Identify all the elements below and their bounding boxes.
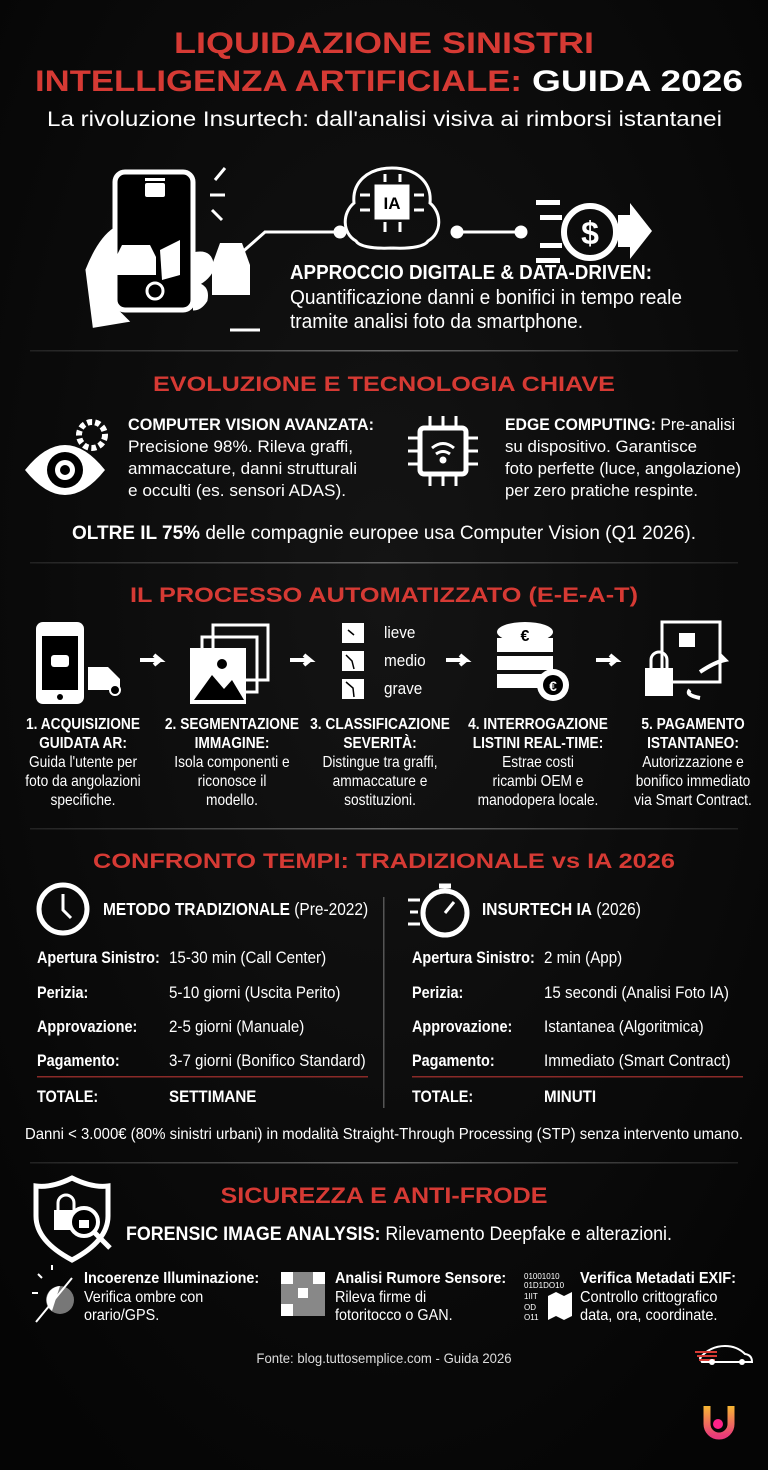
text: edge computing: su dispositivo. Garantisce <box>505 437 697 456</box>
heading: confronto: CONFRONTO TEMPI: TRADIZIONALE vs IA 2026 <box>93 850 675 873</box>
item: rumore sensore: fotoritocco o GAN. <box>335 1306 453 1324</box>
text: computer vision: COMPUTER VISION AVANZATA: <box>128 415 374 434</box>
icon: shield <box>36 1178 110 1260</box>
heading: sicurezza: SICUREZZA E ANTI-FRODE <box>220 1183 548 1208</box>
process steps text: sostituzioni. <box>344 791 416 809</box>
process icons: € <box>549 678 557 694</box>
text: lieve <box>384 623 415 642</box>
text: forensic: FORENSIC IMAGE ANALYSIS: Rilevamento Deepfake e alterazioni. <box>126 1224 672 1245</box>
text: computer vision <box>128 415 374 500</box>
icon: eye with gear <box>25 422 105 495</box>
process steps text: ricambi OEM e <box>493 772 583 790</box>
item: exif: Controllo crittografico <box>580 1288 717 1306</box>
icon: binary map: OD <box>524 1303 536 1312</box>
table: traditional: Approvazione: <box>37 1018 137 1036</box>
icon: fast payment <box>536 200 652 263</box>
text: edge computing: per zero pratiche respinte. <box>505 481 698 500</box>
logo <box>707 1406 731 1436</box>
process steps text: 2. SEGMENTAZIONE <box>165 715 299 733</box>
text: approccio digitale: APPROCCIO DIGITALE & DATA-DRIVEN: <box>290 262 652 284</box>
heading: processo: IL PROCESSO AUTOMATIZZATO (E-E-A-T) <box>130 584 638 607</box>
table: insurtech: Istantanea (Algoritmica) <box>544 1017 704 1036</box>
process steps text: riconosce il <box>198 772 266 790</box>
icon: binary map: 1IIT <box>524 1292 538 1301</box>
icon: clock <box>39 885 87 933</box>
item: illuminazione: orario/GPS. <box>84 1306 159 1324</box>
item: exif: Verifica Metadati EXIF: <box>580 1269 736 1287</box>
table: traditional: SETTIMANE <box>169 1087 257 1106</box>
process steps text: Distingue tra graffi, <box>322 753 438 771</box>
title: LIQUIDAZIONE SINISTRI <box>174 27 594 60</box>
icon: fast payment: $ <box>581 215 599 251</box>
process steps text: ammaccature e <box>333 772 427 790</box>
process steps text: Guida l'utente per <box>29 753 137 771</box>
table: traditional: 15-30 min (Call Center) <box>169 948 326 967</box>
table: insurtech <box>412 899 743 1106</box>
process steps text: Autorizzazione e <box>642 753 744 771</box>
table: insurtech: Perizia: <box>412 984 463 1002</box>
icon: hand with smartphone and cars <box>88 168 340 330</box>
process steps text: 1. ACQUISIZIONE <box>26 715 140 733</box>
item: illuminazione: Verifica ombre con <box>84 1288 203 1306</box>
process steps text: bonifico immediato <box>636 772 750 790</box>
item: rumore sensore: Rileva firme di <box>335 1288 426 1306</box>
title <box>35 27 743 98</box>
table: insurtech: TOTALE: <box>412 1088 473 1106</box>
heading: evoluzione: EVOLUZIONE E TECNOLOGIA CHIAVE <box>153 373 615 396</box>
process steps text: GUIDATA AR: <box>39 734 127 752</box>
table: insurtech: MINUTI <box>544 1087 596 1106</box>
item: exif <box>580 1269 736 1324</box>
text: approccio digitale: Quantificazione danni e bonifici in tempo reale <box>290 287 682 309</box>
process steps text: Estrae costi <box>502 753 574 771</box>
table: traditional: Apertura Sinistro: <box>37 949 160 967</box>
process icons <box>36 622 725 704</box>
table: traditional: 3-7 giorni (Bonifico Standard) <box>169 1051 366 1070</box>
stat: oltre il 75%: OLTRE IL 75% delle compagnie europee usa Computer Vision (Q1 2026). <box>72 523 696 544</box>
table: insurtech: INSURTECH IA (2026) <box>482 899 641 919</box>
process steps text: manodopera locale. <box>478 791 598 809</box>
text: approccio digitale: tramite analisi foto da smartphone. <box>290 311 583 333</box>
item: illuminazione <box>84 1269 259 1324</box>
table: insurtech: Immediato (Smart Contract) <box>544 1051 730 1070</box>
item: illuminazione: Incoerenze Illuminazione: <box>84 1269 259 1287</box>
item: exif: data, ora, coordinate. <box>580 1306 717 1324</box>
table: traditional <box>37 899 368 1106</box>
text: computer vision: ammaccature, danni strutturali <box>128 459 357 478</box>
table: insurtech: Pagamento: <box>412 1052 495 1070</box>
icon: binary map: 01001010 <box>524 1272 560 1281</box>
process steps text: IMMAGINE: <box>195 734 269 752</box>
icon: lighting <box>32 1265 74 1322</box>
text: edge computing <box>505 415 741 500</box>
item: rumore sensore: Analisi Rumore Sensore: <box>335 1269 506 1287</box>
table: traditional: 5-10 giorni (Uscita Perito) <box>169 983 340 1002</box>
process steps text: modello. <box>206 791 258 809</box>
process steps text: specifiche. <box>51 791 115 809</box>
icon: qr noise <box>281 1272 325 1316</box>
table: traditional: 2-5 giorni (Manuale) <box>169 1017 304 1036</box>
icon: binary map <box>524 1272 572 1322</box>
table: traditional: TOTALE: <box>37 1088 98 1106</box>
process steps text: LISTINI REAL-TIME: <box>473 734 603 752</box>
process steps text: 3. CLASSIFICAZIONE <box>310 715 450 733</box>
title: INTELLIGENZA ARTIFICIALE: <box>35 65 522 98</box>
process steps text <box>25 715 752 809</box>
text: computer vision: e occulti (es. sensori ADAS). <box>128 481 346 500</box>
process steps text: Isola componenti e <box>174 753 290 771</box>
icon: stopwatch <box>408 886 467 935</box>
text: computer vision: Precisione 98%. Rileva graffi, <box>128 437 353 456</box>
text: grave <box>384 679 422 698</box>
text: approccio digitale <box>290 262 682 333</box>
process steps text: 4. INTERROGAZIONE <box>468 715 608 733</box>
table: traditional: Perizia: <box>37 984 88 1002</box>
subtitle: La rivoluzione Insurtech: dall'analisi visiva ai rimborsi istantanei <box>47 108 722 131</box>
text: medio <box>384 651 426 670</box>
icon: AI brain: IA <box>384 194 400 213</box>
table: insurtech: 15 secondi (Analisi Foto IA) <box>544 983 729 1002</box>
table: insurtech: Apertura Sinistro: <box>412 949 535 967</box>
table: insurtech: 2 min (App) <box>544 948 622 967</box>
icon: binary map: 01D1DO10 <box>524 1281 565 1290</box>
process icons: € <box>521 628 530 645</box>
table: traditional: Pagamento: <box>37 1052 120 1070</box>
table: traditional: METODO TRADIZIONALE (Pre-2022) <box>103 899 368 919</box>
icon: car logo <box>695 1346 752 1365</box>
item: rumore sensore <box>335 1269 506 1324</box>
source: Fonte: blog.tuttosemplice.com - Guida 2026 <box>256 1351 512 1366</box>
text: edge computing: EDGE COMPUTING: Pre-analisi <box>505 415 735 434</box>
text: edge computing: foto perfette (luce, angolazione) <box>505 459 741 478</box>
process steps text: 5. PAGAMENTO <box>641 715 745 733</box>
process steps text: via Smart Contract. <box>634 791 752 809</box>
icon: AI brain <box>335 168 526 248</box>
process steps text: ISTANTANEO: <box>647 734 739 752</box>
title: GUIDA 2026 <box>532 65 743 98</box>
process steps text: SEVERITÀ: <box>343 734 417 752</box>
icon: chip <box>408 416 478 486</box>
table: insurtech: Approvazione: <box>412 1018 512 1036</box>
icon: binary map: O11 <box>524 1313 539 1322</box>
process steps text: foto da angolazioni <box>25 772 141 790</box>
